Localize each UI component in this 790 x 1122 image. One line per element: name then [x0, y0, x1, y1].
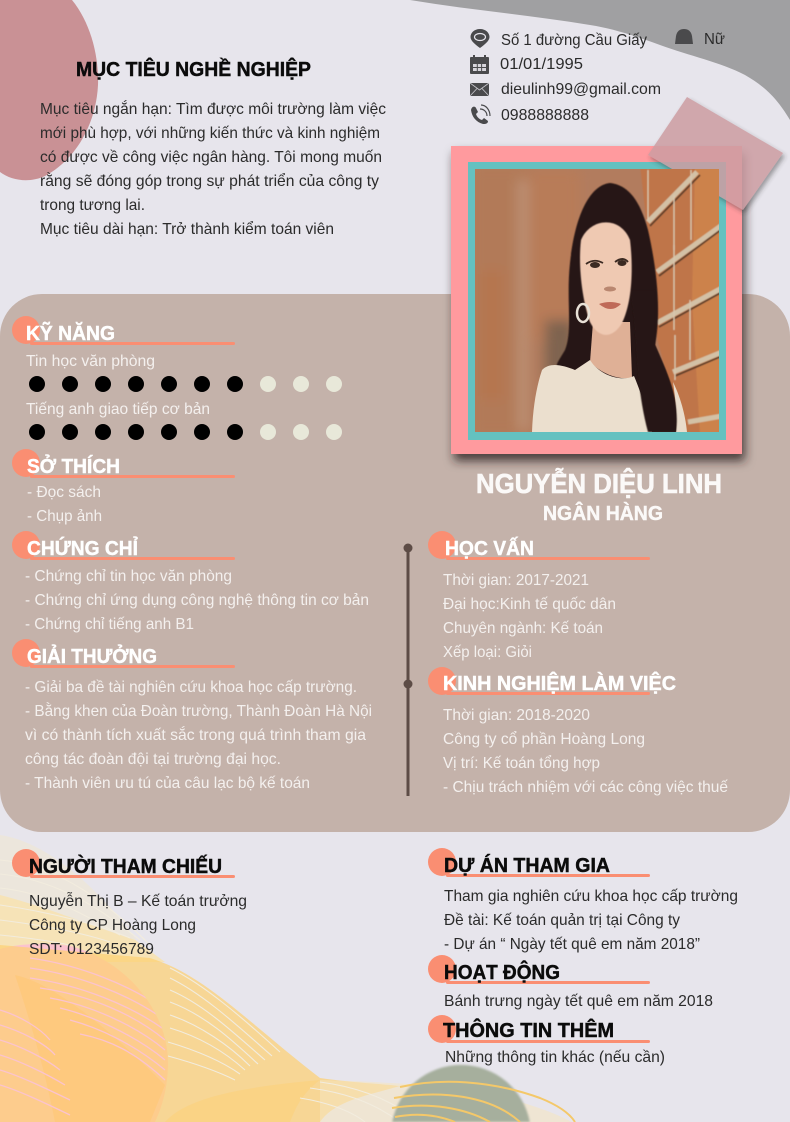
rating dots: english	[29, 424, 342, 440]
icon: gender	[675, 29, 693, 44]
references details	[29, 891, 247, 958]
neck	[590, 322, 632, 378]
heading: HOẠT ĐỘNG	[444, 960, 560, 984]
face	[580, 222, 632, 335]
hair back	[557, 183, 677, 432]
icon: envelope	[470, 83, 489, 96]
section: references	[12, 849, 247, 958]
bottom yellow wedge	[165, 1080, 320, 1122]
heading: career objective: MỤC TIÊU NGHỀ NGHIỆP	[76, 57, 311, 81]
certificates list	[25, 568, 369, 633]
heading: THÔNG TIN THÊM	[443, 1018, 614, 1042]
activities details: Bánh trưng ngày tết quê em năm 2018	[444, 993, 713, 1010]
yellow wave mass	[0, 945, 400, 1122]
section: projects	[428, 848, 738, 953]
photo: portrait of woman at brick wall	[470, 165, 725, 435]
references details: Nguyễn Thị B – Kế toán trưởng	[29, 891, 247, 910]
decorative blob: top left	[0, 0, 98, 180]
section: hobbies	[12, 449, 235, 525]
icon: location pin	[470, 29, 490, 48]
awards list: - Thành viên ưu tú của câu lạc bộ kế toán	[25, 775, 310, 792]
certificates list: - Chứng chỉ tiếng anh B1	[25, 616, 194, 633]
section: additional info	[428, 1015, 665, 1066]
darker orange wedge	[15, 975, 165, 1122]
heading: KINH NGHIỆM LÀM VIỆC	[443, 671, 676, 695]
job title: NGÂN HÀNG	[543, 501, 663, 525]
decorative shape: top right grey	[410, 0, 790, 120]
text: birth date: 01/01/1995	[500, 56, 583, 73]
text block: career objective: có được về công việc ngân hàng. Tôi mong muốn	[40, 149, 382, 166]
experience details: Thời gian: 2018-2020	[443, 707, 590, 724]
education details	[443, 572, 616, 661]
section: certificates	[12, 531, 369, 633]
rating dots: office	[29, 376, 342, 392]
name: NGUYỄN DIỆU LINH	[476, 468, 722, 499]
experience details: Vị trí: Kế toán tổng hợp	[443, 754, 600, 772]
projects details: - Dự án “ Ngày tết quê em năm 2018”	[444, 936, 700, 953]
icon: calendar	[470, 55, 489, 74]
heading: CHỨNG CHỈ	[27, 536, 138, 560]
heading: DỰ ÁN THAM GIA	[444, 854, 610, 877]
icon: phone	[471, 105, 490, 124]
decorative waves and circle: bottom	[0, 835, 575, 1122]
hobbies list: - Đọc sách	[27, 484, 101, 501]
text: phone: 0988888888	[501, 107, 589, 124]
text block: career objective: Mục tiêu dài hạn: Trở thành kiểm toán viên	[40, 220, 334, 238]
text block: career objective: trong tương lai.	[40, 197, 145, 214]
hobbies list	[27, 484, 102, 525]
projects details: Đề tài: Kế toán quản trị tại Công ty	[444, 912, 680, 929]
section: activities	[428, 955, 713, 1010]
heading marker	[428, 531, 650, 560]
section: work experience	[428, 667, 728, 796]
references details: SDT: 0123456789	[29, 941, 154, 958]
awards list: vì có thành tích xuất sắc trong quá trình tham gia	[25, 725, 366, 744]
heading: GIẢI THƯỞNG	[27, 644, 157, 668]
references details: Công ty CP Hoàng Long	[29, 917, 196, 934]
projects details	[444, 888, 738, 953]
main brown panel	[0, 294, 790, 832]
photo frame: pink	[451, 146, 742, 454]
heading: KỸ NĂNG	[26, 322, 115, 345]
pink circle	[0, 944, 168, 1122]
experience details: Công ty cổ phần Hoàng Long	[443, 730, 645, 748]
heading marker	[12, 449, 235, 478]
text: gender: Nữ	[704, 31, 725, 48]
heading marker	[428, 667, 650, 695]
contact details	[470, 29, 725, 124]
wave stripes over pink	[0, 958, 165, 1115]
awards list: - Bằng khen của Đoàn trường, Thành Đoàn Hà Nội	[25, 701, 372, 720]
education details: Thời gian: 2017-2021	[443, 572, 589, 589]
heading marker	[428, 848, 650, 877]
text block: career objective: mới phù hợp, với những kiến thức và kinh nghiệm	[40, 125, 380, 142]
experience details	[443, 707, 728, 796]
projects details: Tham gia nghiên cứu khoa học cấp trường	[444, 888, 738, 905]
timeline divider	[404, 544, 412, 796]
green circle	[392, 1065, 530, 1122]
text block: career objective	[40, 99, 386, 238]
awards list: công tác đoàn đội tại trường đại học.	[25, 751, 281, 768]
pale yellow band	[0, 895, 165, 962]
heading marker	[428, 1015, 650, 1043]
section: education	[428, 531, 650, 661]
heading: HỌC VẤN	[445, 537, 534, 560]
education details: Đại học:Kinh tế quốc dân	[443, 596, 616, 613]
skill label: office: Tin học văn phòng	[26, 353, 155, 370]
text block: career objective: rằng sẽ đóng góp trong sự phát triển của công ty	[40, 171, 379, 190]
awards list	[25, 679, 372, 792]
text block: career objective: Mục tiêu ngắn hạn: Tìm được môi trường làm việc	[40, 99, 386, 118]
certificates list: - Chứng chỉ tin học văn phòng	[25, 568, 232, 585]
decorative tilted rectangle	[648, 97, 783, 210]
facial features	[577, 259, 628, 322]
waves over green circle	[392, 1082, 575, 1122]
skill label: english: Tiếng anh giao tiếp cơ bản	[26, 401, 210, 418]
heading marker	[12, 849, 235, 878]
heading marker	[428, 955, 650, 984]
education details: Xếp loại: Giỏi	[443, 644, 532, 661]
section: awards	[12, 639, 372, 792]
hair front strand	[639, 340, 678, 432]
heading: SỞ THÍCH	[27, 454, 120, 478]
heading marker	[12, 316, 235, 345]
heading marker	[12, 639, 235, 668]
awards list: - Giải ba đề tài nghiên cứu khoa học cấp trường.	[25, 679, 357, 696]
blurred background	[478, 183, 570, 428]
additional info details: Những thông tin khác (nếu cần)	[445, 1049, 665, 1066]
photo frame: teal	[468, 162, 726, 440]
section: skills	[12, 316, 342, 440]
heading: NGƯỜI THAM CHIẾU	[29, 854, 222, 878]
text: address: Số 1 đường Cầu Giấy	[501, 32, 647, 49]
pale striped tail	[320, 1080, 572, 1122]
education details: Chuyên ngành: Kế toán	[443, 620, 603, 637]
faint striped band	[0, 835, 140, 945]
brick wall	[640, 169, 719, 432]
wave stripes pale	[0, 860, 420, 1122]
dress	[532, 360, 652, 432]
certificates list: - Chứng chỉ ứng dụng công nghệ thông tin cơ bản	[25, 592, 369, 609]
experience details: - Chịu trách nhiệm với các công việc thuế	[443, 779, 728, 796]
hobbies list: - Chụp ảnh	[27, 508, 102, 525]
heading marker	[12, 531, 235, 560]
text: email: dieulinh99@gmail.com	[501, 81, 661, 98]
